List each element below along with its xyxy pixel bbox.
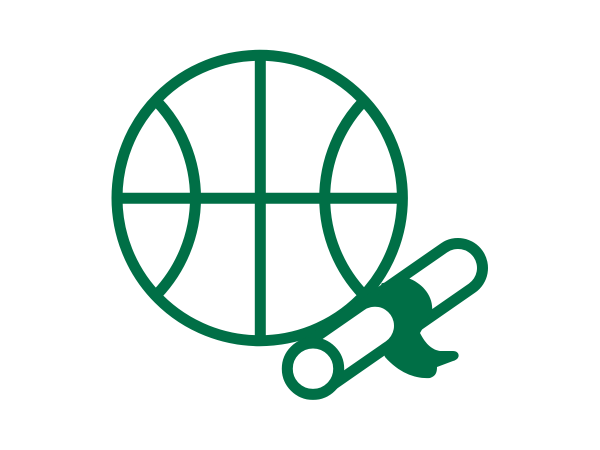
ribbon seal [370,278,459,378]
scroll left end ring [287,343,339,394]
icon: basketball [117,55,403,341]
scroll outer body [313,268,458,369]
scroll left section opening [313,326,375,369]
scroll right section opening [420,268,458,294]
icon: diploma scroll [287,268,459,394]
